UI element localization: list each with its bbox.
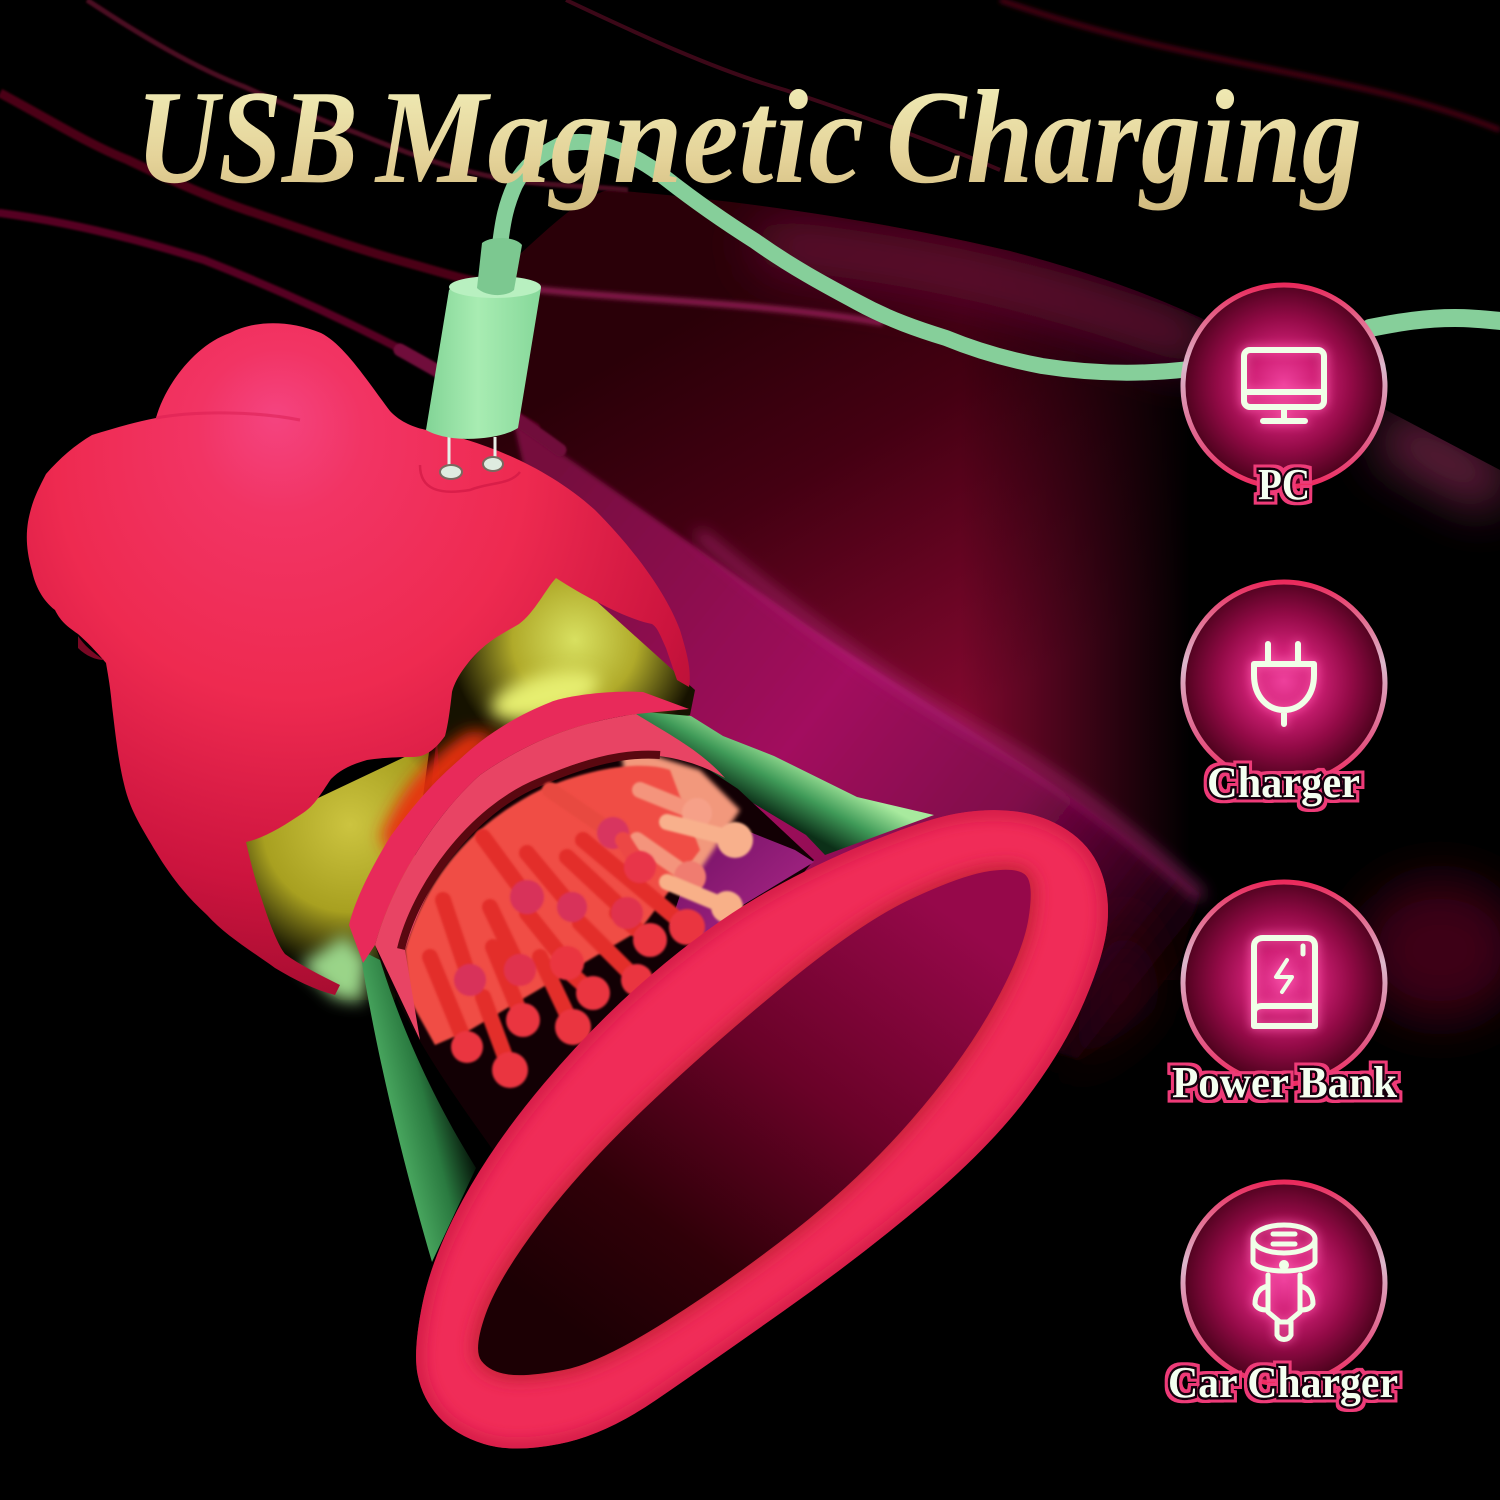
connector top face bbox=[449, 276, 541, 298]
Charger label: Charger bbox=[1207, 758, 1360, 807]
Power Bank disc bbox=[1183, 882, 1385, 1084]
Car Charger label: Car Charger bbox=[1168, 1358, 1398, 1407]
panel: Car Charger bbox=[1168, 1182, 1398, 1407]
PC disc bbox=[1183, 285, 1385, 487]
head seam bbox=[156, 413, 300, 420]
window frame bbox=[375, 714, 725, 1040]
charging cable to PC circle bbox=[500, 142, 1500, 373]
head nub bbox=[78, 636, 104, 660]
product illustration bbox=[27, 323, 1120, 1460]
icon: monitor bbox=[1244, 350, 1324, 421]
neck glow yellow bbox=[487, 661, 603, 729]
magnetic pins bbox=[440, 433, 503, 479]
window inner arc bbox=[401, 755, 660, 949]
panel: Charger bbox=[1183, 582, 1385, 807]
pale bristles bbox=[637, 790, 753, 923]
big suction ring bbox=[400, 800, 1120, 1460]
icon: plug bbox=[1254, 644, 1314, 724]
neck glow orange bbox=[381, 731, 500, 860]
lower green body bbox=[360, 950, 476, 1262]
icon: car charger bbox=[1253, 1225, 1315, 1340]
title: Charging bbox=[886, 63, 1362, 211]
window pale plate bbox=[620, 745, 740, 880]
connector body bbox=[426, 276, 541, 439]
upper green body bbox=[634, 711, 934, 855]
Power Bank label: Power Bank bbox=[1172, 1058, 1398, 1107]
Car Charger disc bbox=[1183, 1182, 1385, 1384]
icon: power bank bbox=[1254, 938, 1315, 1026]
background: dark swoosh bands bbox=[0, 0, 1500, 1065]
collar band bbox=[349, 692, 689, 963]
USB connector and pins bbox=[426, 238, 541, 479]
Charger disc bbox=[1183, 582, 1385, 784]
panel: Power Bank bbox=[1172, 882, 1398, 1107]
window purple back bbox=[670, 815, 814, 945]
gold inner lower bbox=[240, 745, 430, 1000]
red bristles bbox=[430, 790, 705, 1088]
magnetic contact recess bbox=[420, 465, 520, 492]
product head bbox=[27, 323, 690, 995]
PC label: PC bbox=[1258, 460, 1310, 509]
title: Magnetic bbox=[374, 63, 864, 211]
panel: PC bbox=[1183, 285, 1385, 509]
title bbox=[136, 63, 1362, 211]
connector neck bbox=[477, 238, 522, 295]
title: USB bbox=[136, 63, 358, 211]
pale green base bbox=[300, 935, 368, 1002]
window salmon plate bbox=[405, 766, 700, 1045]
gold inner upper bbox=[435, 565, 695, 790]
glass window bbox=[375, 714, 814, 1150]
ring mouth interior bbox=[478, 870, 1031, 1375]
